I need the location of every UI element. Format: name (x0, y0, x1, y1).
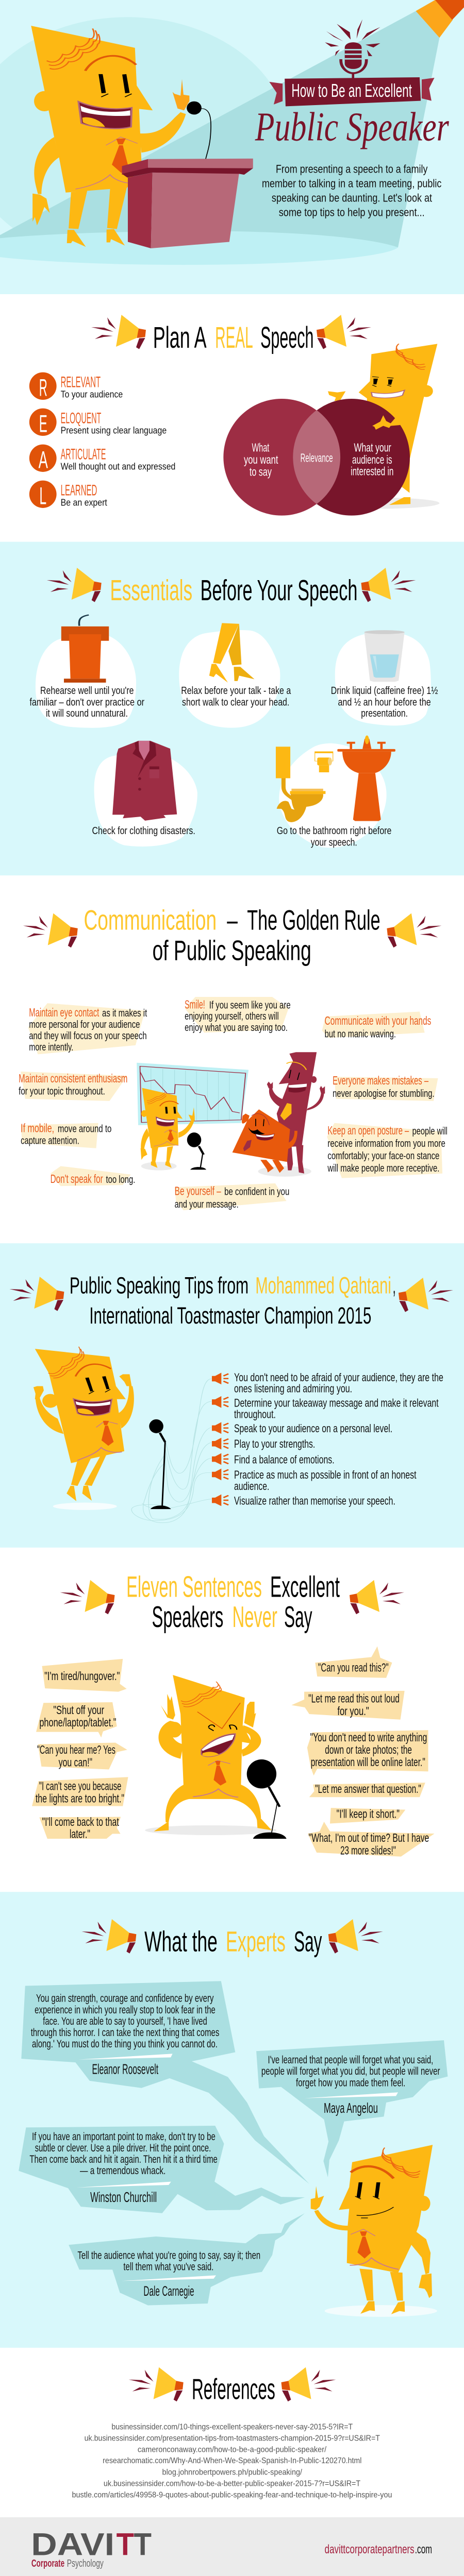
quote: Eleanor Roosevelt: experience in which you really stop to look fear in the (35, 2004, 216, 2016)
quote: Winston Churchill: Then come back and hit it again. Then hit it a third time (29, 2154, 218, 2165)
note: enthusiasm: for your topic throughout. (19, 1086, 105, 1097)
quote: Eleanor Roosevelt (21, 1981, 309, 2184)
bubble (32, 1777, 128, 1806)
quote: Dale Carnegie: Tell the audience what you're going to say, say it; then (77, 2249, 260, 2262)
icon: megaphone left (23, 913, 78, 947)
shadow (53, 1503, 117, 1510)
note: posture (327, 1123, 448, 1178)
note: eye contact: as it makes it (102, 1007, 147, 1019)
icon: megaphone right (281, 2367, 336, 2401)
bubble (37, 1742, 127, 1770)
bubble (42, 1659, 127, 1692)
heading: Essentials (110, 574, 192, 607)
tip: bathroom: your speech. (311, 837, 357, 848)
character: angry speaker (154, 1675, 272, 1832)
panel: Mohammed Qahtani tips (34, 1272, 443, 1523)
note: smile: Smile! (185, 998, 205, 1011)
bubble: "I'll keep it short." (337, 1807, 400, 1821)
microphone on stand (187, 1132, 206, 1170)
character: jumping speaker (34, 1347, 134, 1501)
bubble (39, 1815, 121, 1841)
character behind venn (328, 344, 437, 505)
bubble: "Shut off your (53, 1703, 104, 1717)
quote: Eleanor Roosevelt: through this horror. I can take the next thing that comes (31, 2027, 219, 2039)
heading: Never (233, 1601, 277, 1634)
reference list: blog.johnrobertpowers.ph/public-speaking/ (162, 2467, 303, 2477)
icon: megaphone right (361, 568, 416, 602)
item: Articulate (29, 445, 175, 473)
bubble (36, 1702, 117, 1737)
icon: megaphone right (387, 913, 441, 947)
quote: Maya Angelou: Maya Angelou (324, 2100, 378, 2116)
note: smile: If you seem like you are (209, 999, 291, 1011)
character: speaker at podium (31, 26, 189, 247)
microphone and cable (187, 101, 211, 159)
item: Eloquent: E (39, 410, 47, 437)
note: smile (185, 997, 291, 1033)
spotlight lamp (416, 0, 464, 38)
tip: rehearse: it will sound unnatural. (46, 708, 128, 719)
panel: Plan A REAL Speech: Speech (260, 320, 313, 354)
character arm over venn (372, 407, 400, 430)
tip: rehearse: Rehearse well until you're (40, 685, 134, 697)
tip 2 (212, 1396, 439, 1420)
quote: Eleanor Roosevelt: You gain strength, courage and confidence by every (36, 1992, 214, 2005)
venn diagram (223, 399, 410, 516)
venn diagram: interested in (351, 464, 393, 478)
tip: rehearse (29, 615, 144, 728)
quote: Winston Churchill (19, 2126, 305, 2213)
tip: clothing: Check for clothing disasters. (92, 825, 195, 837)
shadow (312, 498, 439, 509)
venn diagram: What (252, 440, 269, 454)
right speech bubbles (291, 1647, 435, 1857)
panel: What the Experts Say: Say (294, 1925, 322, 1958)
cables (131, 1379, 211, 1523)
bubble: you can!" (59, 1755, 92, 1769)
panel: references and footer: References (192, 2372, 275, 2405)
logo: Davitt: Corporate (31, 2557, 64, 2569)
logo: Davitt: T (117, 2527, 134, 2562)
reference list: businessinsider.com/10-things-excellent-speakers-never-say-2015-5?IR=T (111, 2422, 353, 2431)
bubble: 23 more slides!" (340, 1843, 396, 1857)
tip: relax: Relax before your talk - take a (181, 685, 291, 697)
note: mobile: If mobile, (21, 1122, 54, 1134)
note: mobile: capture attention. (21, 1135, 79, 1147)
heading (84, 904, 380, 967)
line chart board (137, 1063, 248, 1125)
item: Eloquent (29, 409, 167, 437)
tip 1: ones listening and admiring you. (234, 1382, 352, 1395)
quote: Maya Angelou (256, 2040, 448, 2177)
backdrop circle (0, 17, 289, 264)
heading: Say (284, 1601, 312, 1634)
heading: – (227, 904, 238, 936)
tip: relax (179, 623, 291, 728)
character: yellow presenter (141, 1088, 195, 1168)
panel: What the Experts Say (19, 1925, 448, 2213)
item: Learned (29, 481, 107, 510)
bubble (309, 1782, 425, 1797)
item: Eloquent: Present using clear language (61, 426, 167, 436)
note: eye contact: Maintain eye contact (29, 1006, 99, 1019)
logo: Davitt: DAVI (31, 2527, 114, 2562)
logo: Davitt (31, 2527, 152, 2569)
panel: Eleven Sentences (0, 1548, 464, 1892)
panel: Plan A REAL Speech (0, 294, 464, 542)
panel: Plan A REAL Speech: RELEVANT (61, 374, 101, 391)
tip 3 (212, 1422, 392, 1435)
item: Relevant (29, 372, 123, 401)
tip 5 (212, 1453, 335, 1466)
icon: megaphone right (328, 1919, 383, 1954)
heading: Eleven Sentences (126, 1570, 262, 1603)
tip 7 (212, 1494, 395, 1507)
shadow (325, 2305, 437, 2317)
tip 2: throughout. (234, 1408, 276, 1420)
logo: Davitt: Psychology (67, 2557, 104, 2569)
panel: hero (0, 0, 464, 265)
bubble: the lights are too bright." (36, 1791, 124, 1805)
note: smile: enjoying yourself, others will (185, 1010, 279, 1022)
heading: Communication (84, 904, 217, 936)
note: be yourself (175, 1183, 289, 1210)
icon: megaphone left (129, 2367, 184, 2401)
venn diagram: to say (250, 465, 272, 478)
note: be yourself: and your message. (175, 1198, 239, 1210)
note: be yourself: be confident in you (224, 1185, 289, 1197)
podium (122, 159, 253, 248)
note: eye contact: and they will focus on your speech (29, 1030, 147, 1042)
tip 5: Find a balance of emotions. (234, 1453, 335, 1466)
panel background (0, 875, 464, 1243)
quote: Winston Churchill: subtle or clever. Use a pile driver. Hit the point once. (35, 2142, 211, 2154)
bubble (307, 1730, 428, 1775)
tip: rehearse: familiar – don't over practice or (29, 697, 144, 708)
note: length (51, 1166, 135, 1186)
panel: Communication golden rule: Maintain consistent enthusiasm (19, 1072, 127, 1085)
heading (126, 1570, 340, 1634)
shadow (145, 1825, 276, 1835)
venn diagram: Relevance (301, 451, 333, 465)
shadows (141, 1162, 311, 1177)
note: length: too long. (106, 1174, 135, 1185)
icon: megaphone left (9, 1277, 64, 1311)
venn diagram: audience is (352, 453, 392, 466)
note: mistakes (333, 1074, 438, 1101)
bubble: "I'll come back to that (42, 1815, 119, 1828)
heading (70, 1272, 395, 1329)
quote: Winston Churchill: Winston Churchill (90, 2189, 157, 2205)
bubble: for you." (337, 1704, 369, 1718)
panel: Communication golden rule (0, 875, 464, 1243)
quote: Dale Carnegie: tell them what you've said. (123, 2261, 213, 2273)
item: Eloquent: ELOQUENT (61, 410, 101, 427)
item: Learned: Be an expert (61, 498, 107, 508)
tip 4: Play to your strengths. (234, 1437, 315, 1450)
bubble: "I can't see you because (39, 1779, 121, 1793)
quote: Eleanor Roosevelt: face. You are able to say to yourself, 'I have lived (43, 2015, 207, 2027)
panel background (0, 2348, 464, 2517)
bubble (315, 1647, 392, 1678)
note: hands (322, 1012, 431, 1040)
panel: Eleven Sentences: Excellent (270, 1570, 340, 1603)
tip: drink: presentation. (361, 708, 408, 719)
note: eye contact: more intently. (29, 1041, 73, 1053)
item: Relevant: R (39, 374, 47, 401)
icon: megaphone right (317, 315, 371, 349)
icon: megaphone left (47, 568, 102, 602)
heading: Speakers (152, 1601, 223, 1634)
note: mobile (21, 1122, 111, 1148)
microphone on stand (247, 1759, 287, 1839)
reference list: cameronconaway.com/how-to-be-a-good-public-speaker/ (138, 2445, 327, 2454)
intro text (262, 163, 442, 219)
character: expert narrator (311, 2145, 433, 2314)
bubble (308, 1822, 435, 1857)
note: smile: enjoy what you are saying too. (185, 1022, 288, 1033)
panel: references and footer (0, 2348, 464, 2576)
tip: clothing (92, 741, 197, 846)
title banner (269, 77, 435, 106)
quote: Dale Carnegie: Dale Carnegie (143, 2283, 194, 2299)
panel: references and footer: .com (415, 2543, 432, 2556)
tip: relax: short walk to clear your head. (182, 697, 289, 708)
icon: megaphone left (60, 1580, 114, 1614)
reference list (72, 2422, 392, 2499)
tip 6 (212, 1468, 417, 1493)
icon: megaphone left (81, 1919, 136, 1954)
left speech bubbles (32, 1659, 128, 1841)
panel background (0, 1548, 464, 1892)
venn diagram: you want (244, 453, 278, 466)
quote: Eleanor Roosevelt: Eleanor Roosevelt (92, 2061, 158, 2077)
bubble: later." (70, 1827, 90, 1841)
tip 1 (212, 1371, 443, 1395)
footer bar (0, 2517, 464, 2576)
quote: Dale Carnegie (69, 2213, 305, 2306)
panel: Essentials Before Your Speech (29, 574, 438, 848)
tip 6: audience. (234, 1480, 269, 1493)
tip: bathroom (276, 735, 395, 848)
note: hands: but no manic waving. (325, 1028, 396, 1040)
bubble: "I'm tired/hungover." (44, 1669, 120, 1683)
quote: Winston Churchill: If you have an important point to make, don't try to be (32, 2131, 216, 2143)
tip: drink (331, 630, 438, 725)
quote: Eleanor Roosevelt: along.' You must do the thing you think you cannot do. (32, 2038, 218, 2050)
item: Articulate: ARTICULATE (61, 446, 106, 463)
panel: Mohammed Qahtani tips: , (393, 1272, 395, 1298)
logo: Davitt: T (134, 2527, 152, 2562)
note: be yourself: Be yourself – (175, 1184, 221, 1197)
item: Articulate: Well thought out and expressed (61, 462, 175, 472)
stage floor (0, 231, 398, 265)
tip 4 (212, 1437, 315, 1450)
note: eye contact (28, 1003, 147, 1054)
icon: megaphone right (350, 1580, 404, 1614)
icon: megaphone left (91, 315, 146, 349)
character: tall maroon (267, 1052, 325, 1174)
item: Learned: L (39, 482, 46, 510)
note: length: Don't speak for (51, 1173, 103, 1185)
heading: Public Speaking Tips from (70, 1272, 248, 1298)
bubble (330, 1807, 405, 1823)
note: eye contact: more personal for your audience (29, 1019, 140, 1030)
bubble (291, 1691, 405, 1720)
reference list: uk.businessinsider.com/how-to-be-a-better-public-speaker-2015-7?r=US&IR=T (104, 2479, 360, 2488)
heading: REAL (215, 320, 253, 354)
spotlight beam (0, 11, 439, 247)
bubble: "Can you hear me? Yes (37, 1743, 115, 1756)
icon: megaphone right (399, 1278, 453, 1312)
tip list (212, 1371, 443, 1507)
panel: Plan A REAL Speech: LEARNED (61, 482, 97, 499)
quote: Winston Churchill: — a tremendous whack. (80, 2165, 165, 2177)
lower expert panel (69, 2213, 437, 2317)
heading: Experts (226, 1925, 286, 1958)
microphone on stand (149, 1419, 171, 1509)
bubble: "Can you read this?" (318, 1660, 389, 1674)
heading: Plan A (153, 320, 207, 354)
note: enthusiasm (19, 1072, 127, 1101)
item: Relevant: To your audience (61, 389, 123, 400)
venn diagram: What your (354, 440, 391, 454)
panel background (0, 294, 464, 542)
heading: What the (144, 1925, 218, 1958)
icon: microphone emblem (325, 19, 380, 79)
character: orange (233, 1109, 297, 1173)
bubble: phone/laptop/tablet." (39, 1716, 117, 1729)
note: mobile: move around to (58, 1123, 111, 1134)
item: Articulate: A (39, 446, 48, 473)
